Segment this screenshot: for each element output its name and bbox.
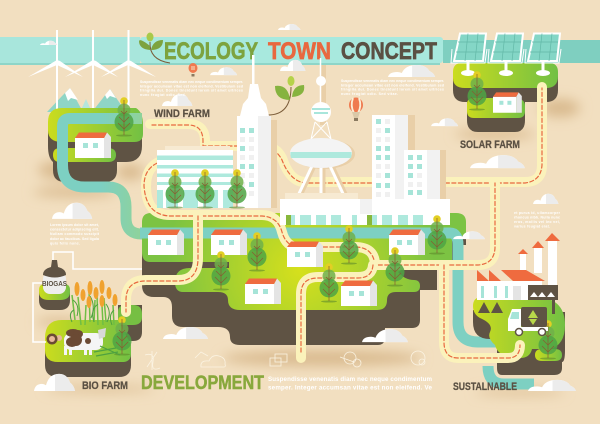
solar panel 2 xyxy=(488,34,524,76)
icon: pollution sign xyxy=(528,285,558,314)
text block: left paragraph: consectetur adipiscing elit. xyxy=(50,228,99,232)
text block: top left paragraph: Integer accumsan vitae est non eleifend. Vestibulum sed xyxy=(140,84,243,88)
text block: right paragraph: varius feugiat erat. xyxy=(514,224,550,228)
label: sustainable: SUSTALNABLE xyxy=(453,381,517,393)
icon: leaf sprout by tower xyxy=(268,76,304,115)
road: wind farm to solar farm xyxy=(150,87,542,183)
text block: top right paragraph: Suspendisse venenatis diam nec neque condimentum semper. xyxy=(341,79,444,83)
title xyxy=(164,38,437,65)
building: saucer tower xyxy=(290,58,355,200)
icon: gauges xyxy=(340,352,361,367)
icon: dna xyxy=(145,351,160,370)
building: twin towers xyxy=(372,115,446,201)
road: south branch xyxy=(301,265,373,358)
text block: left paragraph: dolor ac faucibus. Sed ligula xyxy=(50,237,99,241)
houses xyxy=(75,92,522,306)
text block: left paragraph: quis felis nunc. xyxy=(50,241,80,245)
text block: top right paragraph: Integer accumsan vitae est non eleifend. Vestibulum sed xyxy=(341,83,444,87)
river xyxy=(62,118,534,384)
panel: bio farm island xyxy=(45,305,142,377)
text block: right paragraph: eros, mollis vel leo vel, xyxy=(514,220,560,224)
clouds xyxy=(34,24,576,391)
solar panel 1 xyxy=(451,34,487,76)
turbine 2 xyxy=(65,30,118,114)
icon: waste piles xyxy=(478,302,503,313)
icon: gears xyxy=(411,351,425,365)
panel: sustainable island xyxy=(473,297,565,375)
icon: speech bubbles xyxy=(270,354,287,366)
icon: balloon large xyxy=(349,98,363,121)
icon: wind turbines xyxy=(28,30,156,114)
text block: top right paragraph: fringilla dui. Donec tincidunt lorem sit amet ultrices xyxy=(341,88,444,92)
text block: top left paragraph: fringilla dui. Donec tincidunt lorem sit amet ultrices xyxy=(140,89,243,93)
icon: cloud outline xyxy=(195,352,225,367)
text block: bottom paragraph: semper. Integer accumsan vitae est non eleifend. Ve xyxy=(268,384,433,391)
icon: solar panels xyxy=(451,34,561,76)
text block: right paragraph: et purus id, ullamcorper xyxy=(514,211,561,215)
label: wind farm: WIND FARM xyxy=(154,108,210,120)
solar panel 3 xyxy=(525,34,561,76)
road: to sustainable xyxy=(444,265,520,358)
factory xyxy=(477,233,560,300)
building: long base xyxy=(280,193,450,225)
text block: bottom paragraph: Suspendisse venenatis diam nec neque condimentum xyxy=(268,376,432,383)
building: left office xyxy=(157,146,233,208)
icon: recycling truck xyxy=(508,307,548,336)
road: town loop to sustainable junction xyxy=(144,160,495,265)
icon: corn field xyxy=(70,280,118,325)
label: biogas: BIOGAS xyxy=(42,279,67,288)
icon: biogas tank xyxy=(39,260,70,310)
turbine 3 xyxy=(101,30,156,110)
icon: cow xyxy=(46,328,120,356)
chimneys xyxy=(518,233,560,288)
title word: town: TOWN xyxy=(268,38,331,65)
turbine 1 xyxy=(28,30,83,114)
road network xyxy=(126,87,542,358)
title word: ecology: ECOLOGY xyxy=(164,38,258,65)
icon: balloon small xyxy=(188,63,198,76)
panel: main town island xyxy=(142,213,466,345)
biogas pipes xyxy=(33,252,142,342)
text block: top right paragraph: nunc feugiat odio. Sed vitae. xyxy=(341,92,398,96)
text block: right paragraph: rhoncus nibh. Nulla nunc xyxy=(514,216,560,220)
panel: solar farm island xyxy=(453,63,558,132)
building: skyscraper xyxy=(237,55,277,208)
text block: top left paragraph: Suspendisse venenatis diam nec neque condimentum semper. xyxy=(140,80,243,84)
heading: development: DEVELOPMENT xyxy=(141,372,264,394)
trees xyxy=(112,71,558,359)
road: branch to bio farm xyxy=(126,216,198,312)
icon: leaf sprout by title xyxy=(139,32,170,63)
text block: left paragraph: Nullam commodo suscipit xyxy=(50,232,100,236)
text block: top left paragraph: nunc feugiat odio. Sed. xyxy=(140,93,186,97)
text block: left paragraph: Lorem ipsum dolor sit amet, xyxy=(50,223,99,227)
panel: wind farm island xyxy=(48,108,143,182)
soft ground shadows xyxy=(33,99,580,395)
faint line icons xyxy=(145,351,425,370)
label: bio farm: BIO FARM xyxy=(82,380,128,392)
title band xyxy=(0,37,600,65)
title word: concept: CONCEPT xyxy=(341,38,437,65)
mountains xyxy=(47,88,126,112)
label: solar farm: SOLAR FARM xyxy=(460,139,520,151)
